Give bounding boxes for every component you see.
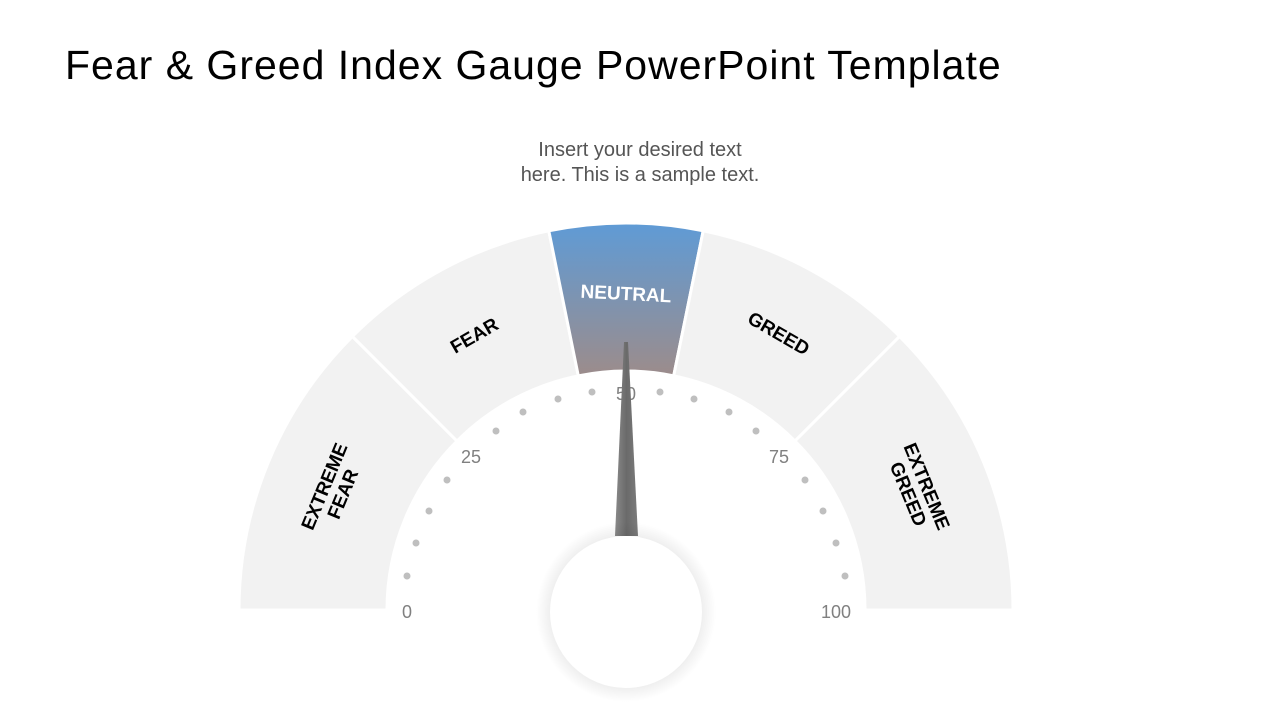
tick labels (402, 384, 851, 622)
tick labels: 0 (402, 602, 412, 622)
text block: description: here. This is a sample text. (521, 164, 759, 186)
segment labels: FEAR (447, 314, 503, 358)
tick labels: 25 (461, 447, 481, 467)
tick dots (404, 388, 848, 580)
segment labels: EXTREME (298, 440, 352, 533)
segment labels: GREED (885, 459, 930, 530)
segment: fear (352, 231, 578, 441)
text block: description: Insert your desired text (538, 139, 742, 161)
needle (615, 342, 638, 536)
segment labels: GREED (744, 308, 813, 360)
segment: neutral (549, 223, 703, 376)
tick labels: 50 (616, 384, 636, 404)
segment labels: NEUTRAL (580, 282, 672, 307)
segment: extreme fear (239, 336, 457, 610)
segment: greed (674, 231, 900, 441)
text block: description (521, 139, 759, 186)
tick labels: 75 (769, 447, 789, 467)
segment labels: FEAR (324, 466, 363, 522)
hub circle (536, 522, 716, 702)
title: Fear & Greed Index Gauge PowerPoint Template (65, 42, 1002, 88)
tick labels: 100 (821, 602, 851, 622)
segment labels (298, 282, 953, 541)
segment: extreme greed (795, 336, 1013, 610)
segment labels: EXTREME (899, 440, 953, 533)
